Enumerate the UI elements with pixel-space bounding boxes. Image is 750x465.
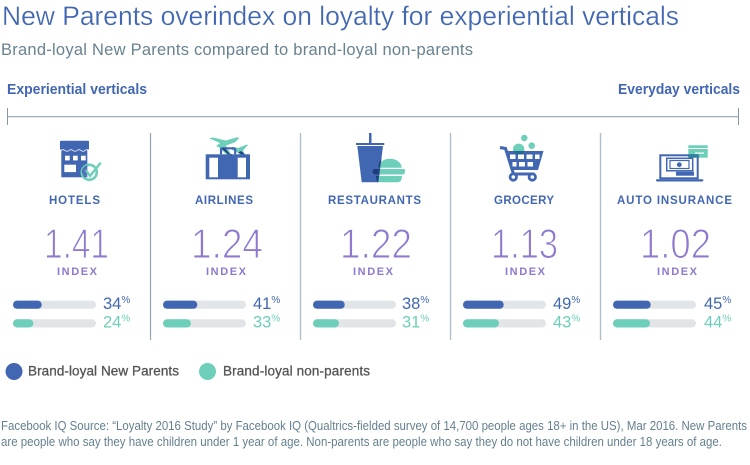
icon: hotel <box>60 141 101 180</box>
legend label: non-parents: Brand-loyal non-parents <box>223 364 370 379</box>
value: 49%: 49 <box>553 295 571 313</box>
label: index: INDEX <box>657 266 698 278</box>
icon: plane and suitcase <box>206 137 250 179</box>
axis label: experiential: Experiential verticals <box>7 82 147 98</box>
bar: new parents 41% <box>163 301 246 309</box>
value: 33%: 33 <box>253 314 271 332</box>
value: 44%: % <box>722 314 731 324</box>
label: index: INDEX <box>505 266 546 278</box>
value: 38%: 38 <box>402 295 420 313</box>
bar: non-parents 43% <box>463 319 546 328</box>
value: 49%: % <box>571 295 580 306</box>
panel: restaurants <box>313 133 429 332</box>
value: 43%: % <box>571 314 580 324</box>
title: New Parents overindex on loyalty for experiential verticals <box>2 1 679 31</box>
icon: laptop and card <box>656 145 708 182</box>
value: 1.22 index: 1.22 <box>340 220 412 267</box>
panel: hotels <box>13 141 130 332</box>
bar: non-parents 44% <box>613 319 696 328</box>
value: 1.02 index: 1.02 <box>640 220 711 267</box>
value: 33%: % <box>271 314 280 324</box>
bar: new parents 45% <box>613 301 696 309</box>
axis line <box>8 108 738 125</box>
value: 24%: 24 <box>103 314 121 332</box>
label: airlines: AIRLINES <box>195 195 253 207</box>
panel: grocery <box>463 135 580 332</box>
label: index: INDEX <box>206 266 247 278</box>
legend label: new parents: Brand-loyal New Parents <box>28 364 179 379</box>
subtitle: Brand-loyal New Parents compared to brand-loyal non-parents <box>1 41 473 59</box>
value: 31%: % <box>420 314 429 324</box>
label: auto insurance: AUTO INSURANCE <box>617 195 732 207</box>
value: 34%: % <box>121 295 130 306</box>
value: 45%: % <box>722 295 731 306</box>
bar: new parents 38% <box>313 301 396 309</box>
value: 44%: 44 <box>704 314 722 332</box>
legend swatch: non-parents <box>199 363 216 380</box>
value: 1.24 index: 1.24 <box>191 220 263 267</box>
label: restaurants: RESTAURANTS <box>328 195 421 207</box>
value: 24%: % <box>121 314 130 324</box>
bar: non-parents 31% <box>313 319 396 328</box>
value: 34%: 34 <box>103 295 121 313</box>
panel: airlines <box>163 137 280 332</box>
label: index: INDEX <box>353 266 394 278</box>
bar: non-parents 24% <box>13 319 96 328</box>
value: 41%: % <box>271 295 280 306</box>
value: 1.41 index: 1.41 <box>44 220 109 267</box>
label: index: INDEX <box>57 266 98 278</box>
bar: new parents 49% <box>463 301 546 309</box>
value: 1.13 index: 1.13 <box>491 220 558 267</box>
icon: cup and burger <box>356 133 405 182</box>
value: 45%: 45 <box>704 295 722 313</box>
value: 31%: 31 <box>402 314 420 332</box>
value: 43%: 43 <box>553 314 571 332</box>
bar: new parents 34% <box>13 301 96 309</box>
value: 38%: % <box>420 295 429 306</box>
panel: auto insurance <box>613 145 732 332</box>
axis: experiential to everyday verticals <box>7 82 740 125</box>
axis label: everyday: Everyday verticals <box>618 82 740 98</box>
label: hotels: HOTELS <box>49 195 100 207</box>
bar: non-parents 33% <box>163 319 246 328</box>
legend swatch: new parents <box>6 363 22 380</box>
icon: shopping cart <box>500 135 544 180</box>
label: grocery: GROCERY <box>494 195 554 207</box>
value: 41%: 41 <box>253 295 271 313</box>
legend <box>6 363 370 380</box>
source footnote <box>1 419 747 449</box>
